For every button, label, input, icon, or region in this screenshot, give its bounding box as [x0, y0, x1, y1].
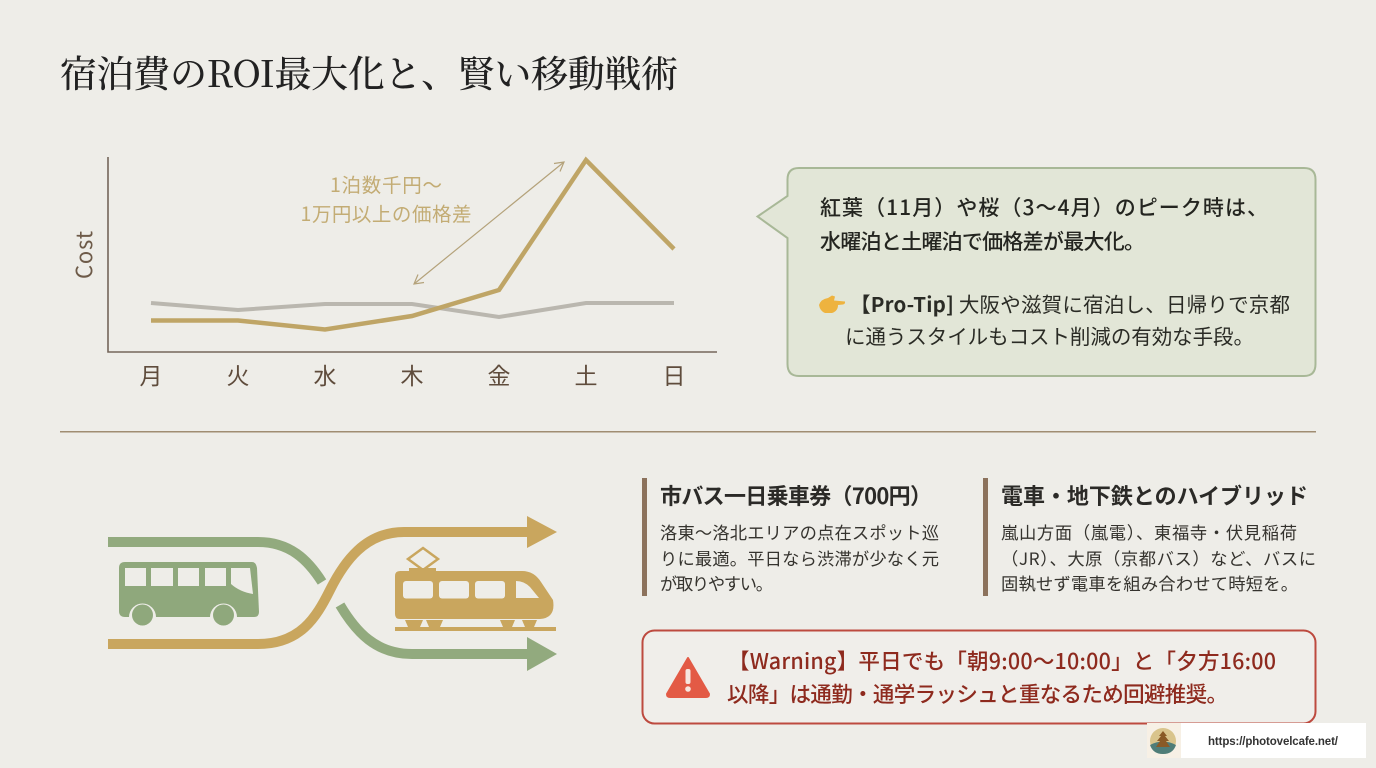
gray line: normal season [151, 303, 674, 317]
speech bubble [758, 168, 1316, 376]
icon: pagoda logo [1150, 728, 1176, 754]
column body: （JR）、大原（京都バス）など、バスに [1001, 545, 1316, 570]
annotation: price gap [300, 169, 472, 227]
callout main text [820, 192, 1268, 256]
column body: 洛東〜洛北エリアの点在スポット巡 [660, 519, 939, 544]
column heading: 電車・地下鉄とのハイブリッド [1001, 479, 1308, 511]
source badge [1147, 723, 1366, 758]
callout main text: 水曜泊と土曜泊で価格差が最大化。 [820, 226, 1145, 256]
x axis weekday labels: 日 [662, 357, 686, 391]
x axis weekday labels: 水 [314, 357, 336, 391]
chart axes [108, 157, 717, 352]
icon: pointing hand [819, 296, 845, 313]
annotation: price gap: 1泊数千円〜 [330, 169, 442, 198]
pro tip text: 【Pro-Tip] 大阪や滋賀に宿泊し、日帰りで京都 [850, 288, 1290, 318]
column body: 固執せず電車を組み合わせて時短を。 [1001, 570, 1298, 595]
pro tip text: に通うスタイルもコスト削減の有効な手段。 [845, 320, 1254, 350]
green arrow, lower right [340, 605, 557, 671]
column: city bus day pass [642, 478, 939, 596]
x axis weekday labels: 火 [226, 357, 250, 391]
title: 宿泊費のROI最大化と、賢い移動戦術 [60, 44, 678, 98]
column body [660, 519, 939, 595]
column body: りに最適。平日なら渋滞が少なく元 [660, 545, 939, 570]
column: train and subway hybrid [983, 478, 1316, 596]
callout panel: peak pricing and pro tip [758, 168, 1316, 376]
warning text: 以降」は通勤・通学ラッシュと重なるため回避推奨。 [727, 678, 1228, 709]
column heading: 市バス一日乗車券（700円） [660, 479, 932, 511]
url: https://photovelcafe.net/ [1208, 736, 1339, 748]
gold line: peak season [151, 160, 674, 330]
callout main text: 紅葉（11月）や桜（3〜4月）のピーク時は、 [820, 192, 1268, 222]
double arrow: price gap [414, 162, 564, 284]
y axis label: Cost [67, 231, 99, 279]
warning text: 【Warning】平日でも「朝9:00〜10:00」と「夕方16:00 [728, 645, 1276, 676]
warning panel [642, 630, 1316, 724]
x axis weekday labels: 土 [574, 357, 598, 391]
icon: bus [119, 562, 259, 626]
line chart: weekly cost [67, 157, 717, 391]
green track, upper left [108, 542, 322, 582]
column body: 嵐山方面（嵐電）、東福寺・伏見稲荷 [1001, 519, 1297, 544]
icon: warning triangle [667, 658, 709, 697]
annotation: price gap: 1万円以上の価格差 [300, 198, 472, 227]
x axis weekday labels: 月 [140, 357, 162, 391]
x axis weekday labels [140, 357, 686, 391]
x axis weekday labels: 木 [400, 357, 424, 391]
gold arrow crossing [108, 516, 557, 644]
column body [1001, 519, 1316, 595]
x axis weekday labels: 金 [488, 357, 510, 391]
column body: が取りやすい。 [660, 570, 773, 595]
pro tip text [845, 288, 1290, 350]
warning text [727, 645, 1276, 709]
icon: train [395, 548, 556, 631]
transit diagram: bus to train [108, 516, 557, 671]
